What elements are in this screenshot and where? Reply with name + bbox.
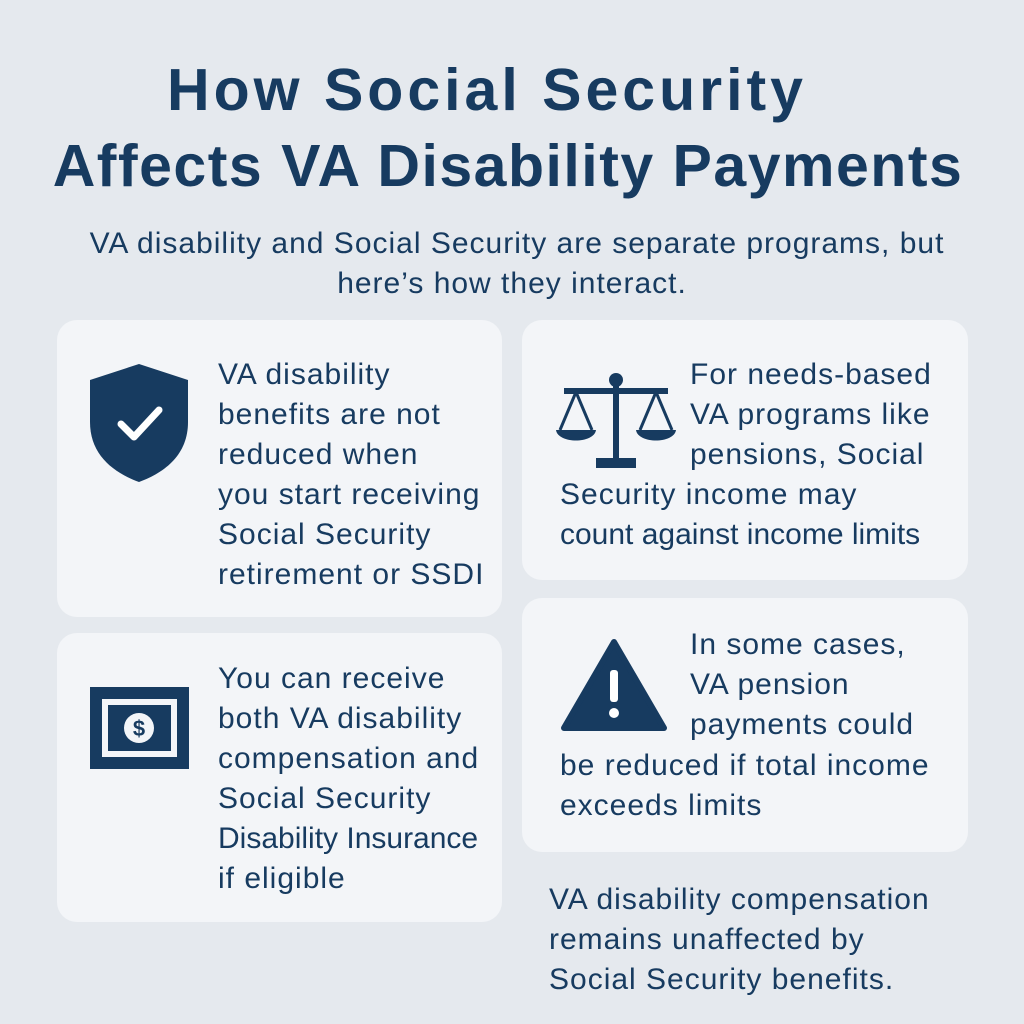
text: receive both: Social Security: [218, 782, 431, 815]
text: needs-based: Security income may: [560, 478, 857, 511]
text: pension reduced: In some cases,: [690, 628, 906, 661]
title: [53, 57, 963, 199]
title: How Social Security: [167, 57, 807, 123]
icon: scales: [556, 373, 676, 468]
text: pension reduced: be reduced if total income: [560, 749, 930, 782]
subtitle: here’s how they interact.: [337, 267, 687, 300]
text: needs-based: [560, 358, 932, 551]
icon: shield: [90, 364, 188, 482]
panel: needs-based: [522, 320, 968, 580]
text: pension reduced: VA pension: [690, 668, 850, 701]
text: receive both: both VA disability: [218, 702, 462, 735]
text: needs-based: count against income limits: [560, 518, 920, 551]
title: Affects VA Disability Payments: [53, 133, 963, 199]
text: not reduced: Social Security: [218, 518, 431, 551]
text: pension reduced: [560, 628, 930, 822]
text: not reduced: VA disability: [218, 358, 391, 391]
subtitle: VA disability and Social Security are separate programs, but: [90, 227, 944, 260]
text: not reduced: benefits are not: [218, 398, 441, 431]
text: receive both: [218, 662, 479, 895]
panel: receive both: [57, 633, 502, 922]
footer note: [549, 883, 930, 996]
text: needs-based: For needs-based: [690, 358, 932, 391]
subtitle: [90, 227, 944, 300]
text: pension reduced: exceeds limits: [560, 789, 762, 822]
icon: warning: [561, 639, 667, 731]
text: not reduced: retirement or SSDI: [218, 558, 484, 591]
icon: money: [90, 687, 189, 769]
text: receive both: You can receive: [218, 662, 445, 695]
footer note: Social Security benefits.: [549, 963, 894, 996]
text: receive both: compensation and: [218, 742, 479, 775]
text: receive both: Disability Insurance: [218, 822, 478, 855]
footer note: remains unaffected by: [549, 923, 865, 956]
text: not reduced: [218, 358, 484, 591]
text: pension reduced: payments could: [690, 708, 914, 741]
text: needs-based: VA programs like: [690, 398, 931, 431]
panel: not reduced: [57, 320, 502, 617]
text: not reduced: you start receiving: [218, 478, 480, 511]
footer note: VA disability compensation: [549, 883, 930, 916]
text: not reduced: reduced when: [218, 438, 418, 471]
text: receive both: if eligible: [218, 862, 346, 895]
panel: pension reduced: [522, 598, 968, 852]
icon: money: $: [133, 716, 145, 741]
text: needs-based: pensions, Social: [690, 438, 924, 471]
